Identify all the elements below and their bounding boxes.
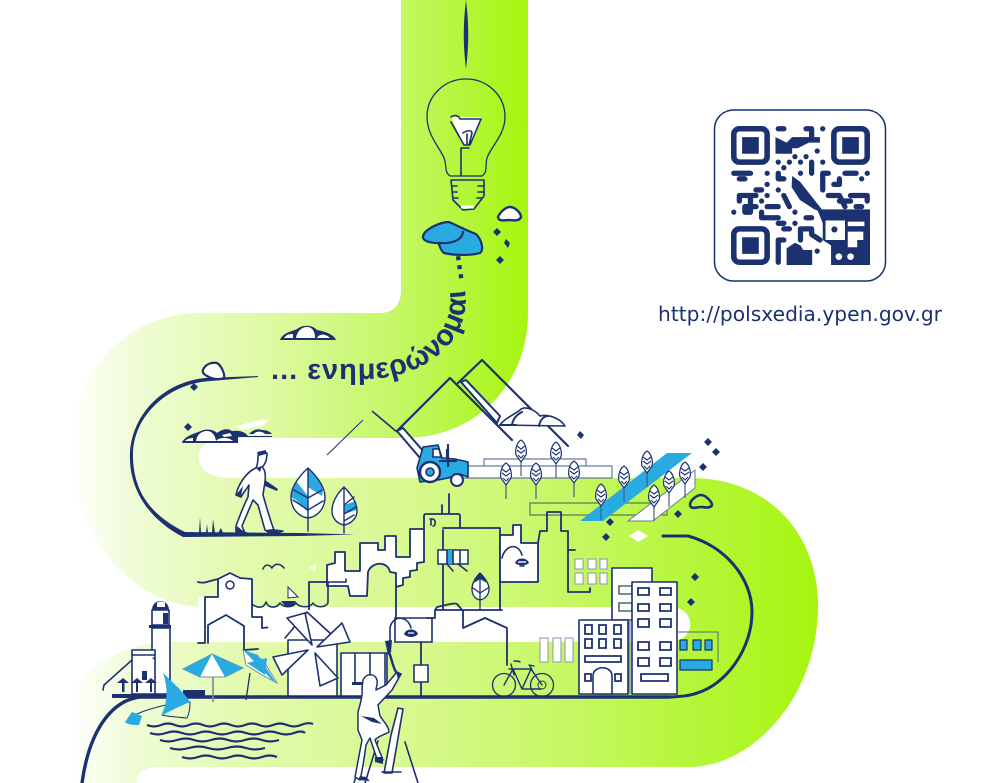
diamonds near cloud	[493, 228, 510, 264]
white diamond	[629, 530, 648, 542]
promenade ground	[112, 690, 205, 698]
wheat stalks	[501, 440, 579, 499]
fence shed	[341, 653, 387, 696]
icon: light bulb	[427, 79, 505, 210]
icon: white pebble	[498, 207, 521, 220]
tall tower outlines	[424, 494, 500, 610]
street lamp box	[500, 525, 538, 582]
scalloped wall and sailboat	[252, 579, 346, 640]
grass tufts	[199, 517, 223, 533]
green ribbon background	[30, 0, 818, 783]
QR code panel	[714, 110, 886, 281]
windmill	[273, 612, 350, 696]
ladder between blocks	[628, 620, 630, 694]
website URL: http://polsxedia.ypen.gov.gr	[658, 302, 943, 326]
connecting lines between blocks	[309, 582, 396, 640]
woman on ladder painting	[354, 640, 418, 783]
field rectangles	[463, 459, 667, 515]
icon: bicycle	[492, 661, 554, 696]
skyline white stepped block	[327, 529, 424, 596]
parasol tilted	[243, 650, 277, 700]
lamp and post	[390, 618, 432, 696]
walking person	[236, 450, 283, 534]
lighthouse	[103, 601, 171, 694]
blue and white strips	[580, 453, 695, 521]
back apartment block	[612, 568, 652, 620]
heading: enimeronomai curved text: ... ενημερώνομαι ...	[272, 256, 466, 385]
parasol large	[183, 654, 243, 702]
diamonds left	[184, 383, 198, 431]
icon: big leaf	[291, 468, 325, 531]
path ground line and lower curve	[82, 697, 670, 783]
front apartment block	[579, 620, 628, 694]
tall apartment block	[632, 582, 677, 694]
path line right arc	[663, 536, 752, 697]
icon: blue cloud pebbles	[423, 222, 482, 255]
diamonds right	[602, 438, 720, 606]
icon: small diamond top right	[577, 431, 584, 439]
stepped building right	[538, 512, 590, 592]
church with arched door	[198, 573, 272, 650]
wheat stalks on strips	[596, 451, 690, 521]
birds	[263, 564, 284, 569]
needle icon	[464, 0, 468, 69]
icon: city leaf	[472, 573, 489, 610]
blue windows low building	[678, 632, 718, 670]
icon: sailboat	[125, 673, 190, 725]
beach umbrellas small	[117, 678, 157, 692]
icon: small leaf	[332, 487, 357, 533]
line structure to bicycle	[427, 603, 507, 665]
white bars	[540, 638, 573, 662]
mountains	[327, 360, 568, 458]
icon: blue tractor	[417, 445, 468, 486]
small white windows	[575, 559, 607, 584]
white arrow mark	[309, 564, 316, 571]
middle cloud group	[182, 419, 272, 443]
top cloud	[280, 326, 336, 340]
awning	[438, 550, 468, 571]
water waves	[147, 723, 313, 758]
pebble outline right	[690, 495, 712, 508]
right mountain cloud	[500, 408, 565, 426]
pebble on line	[203, 363, 224, 379]
path line upper left loop	[130, 376, 355, 537]
